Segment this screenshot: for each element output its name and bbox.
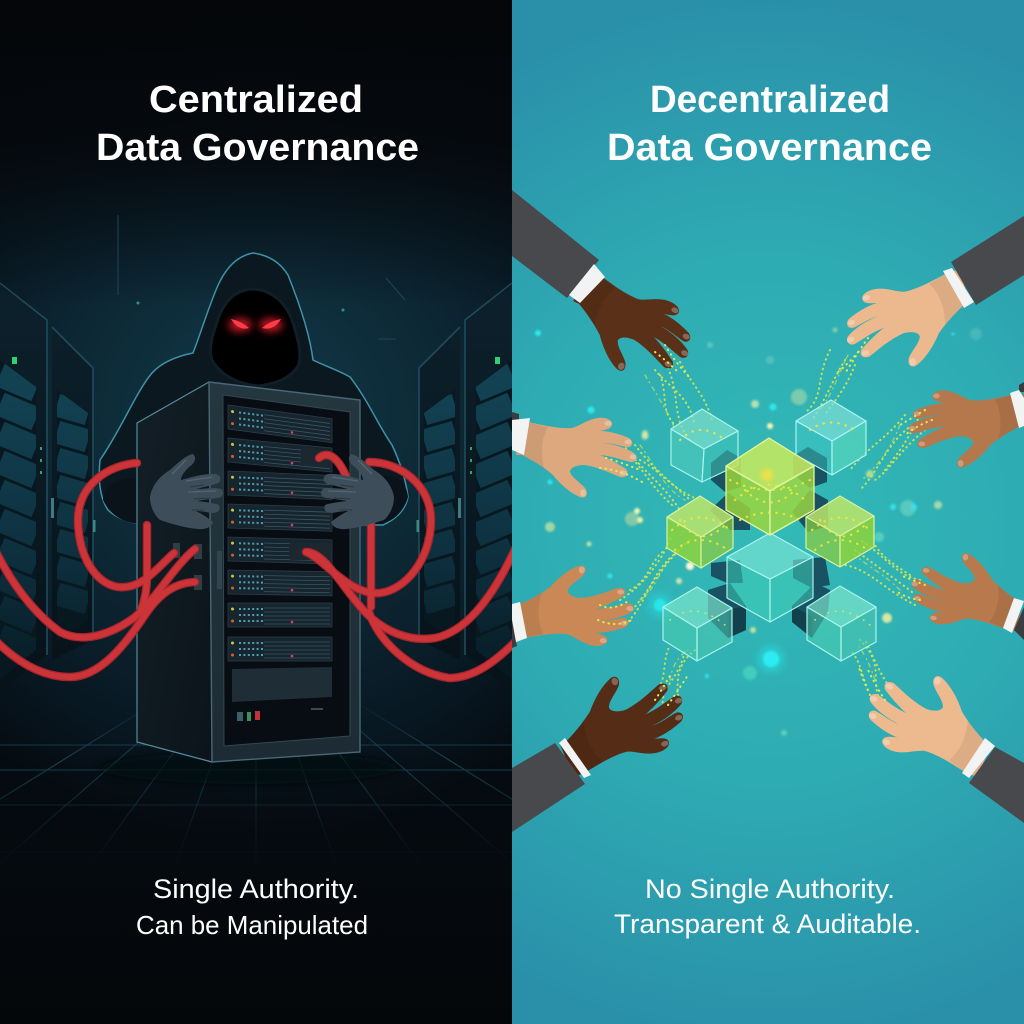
cube [671,409,738,482]
title: centralized: Centralized [149,79,363,121]
title: decentralized: Decentralized [650,79,890,121]
right sleeve [370,476,408,523]
side connectors [173,543,202,590]
arm: top left dark hand [512,190,705,393]
floor grid [0,640,642,880]
plugs [289,447,331,560]
panel background [0,0,512,1024]
data streams [620,350,925,712]
cube [726,438,814,535]
inner panel [223,395,350,746]
fingertip particles [598,338,932,705]
arm: middle left lower hand [511,562,635,648]
rack units [228,405,332,661]
server front [209,382,360,762]
cube [806,496,874,567]
arm: middle left upper hand [512,412,637,497]
arm: bottom left dark hand [512,658,696,832]
dark back cubes [708,447,830,638]
lower blank panel [232,667,332,702]
server racks right [416,283,512,690]
panel: decentralized [511,0,1024,1024]
bokeh particles [535,328,982,736]
caption: decentralized: Transparent & Auditable. [614,909,921,939]
panel: centralized [0,0,642,1024]
icon: right gloved hand [321,454,394,529]
cube sparkle [670,422,870,625]
panel background [512,0,1024,1024]
title: centralized [96,79,419,169]
hood and body [99,253,408,525]
blockchain cubes [663,400,876,661]
caption: centralized: Can be Manipulated [136,910,368,940]
specks [136,302,344,312]
cables [0,455,517,678]
caption: centralized [136,874,368,940]
arm: top right light hand [835,216,1024,382]
cables left [0,463,195,677]
left sleeve [103,478,160,524]
server rack [137,382,360,762]
icon: hooded figure [99,253,408,525]
cube [807,586,876,661]
face opening [210,289,300,386]
status lights [237,708,323,721]
icon: left gloved hand [150,454,223,529]
floor shadow [100,752,400,784]
cube [663,587,732,661]
cube [727,533,813,622]
arm: bottom right light hand [855,657,1024,823]
title: decentralized: Data Governance [607,127,932,169]
server racks left [0,283,96,690]
arm: middle right upper hand [909,382,1024,468]
server side [137,382,212,762]
caption: centralized: Single Authority. [153,874,359,904]
arm: middle right lower hand [906,546,1024,640]
cube [796,400,866,475]
caption: decentralized: No Single Authority. [645,874,895,904]
glowing eyes [228,318,283,332]
title: decentralized [607,79,932,169]
cables right [306,455,517,678]
cube [667,496,733,568]
title: centralized: Data Governance [96,127,419,169]
handle [217,551,222,589]
caption: decentralized [614,874,921,939]
